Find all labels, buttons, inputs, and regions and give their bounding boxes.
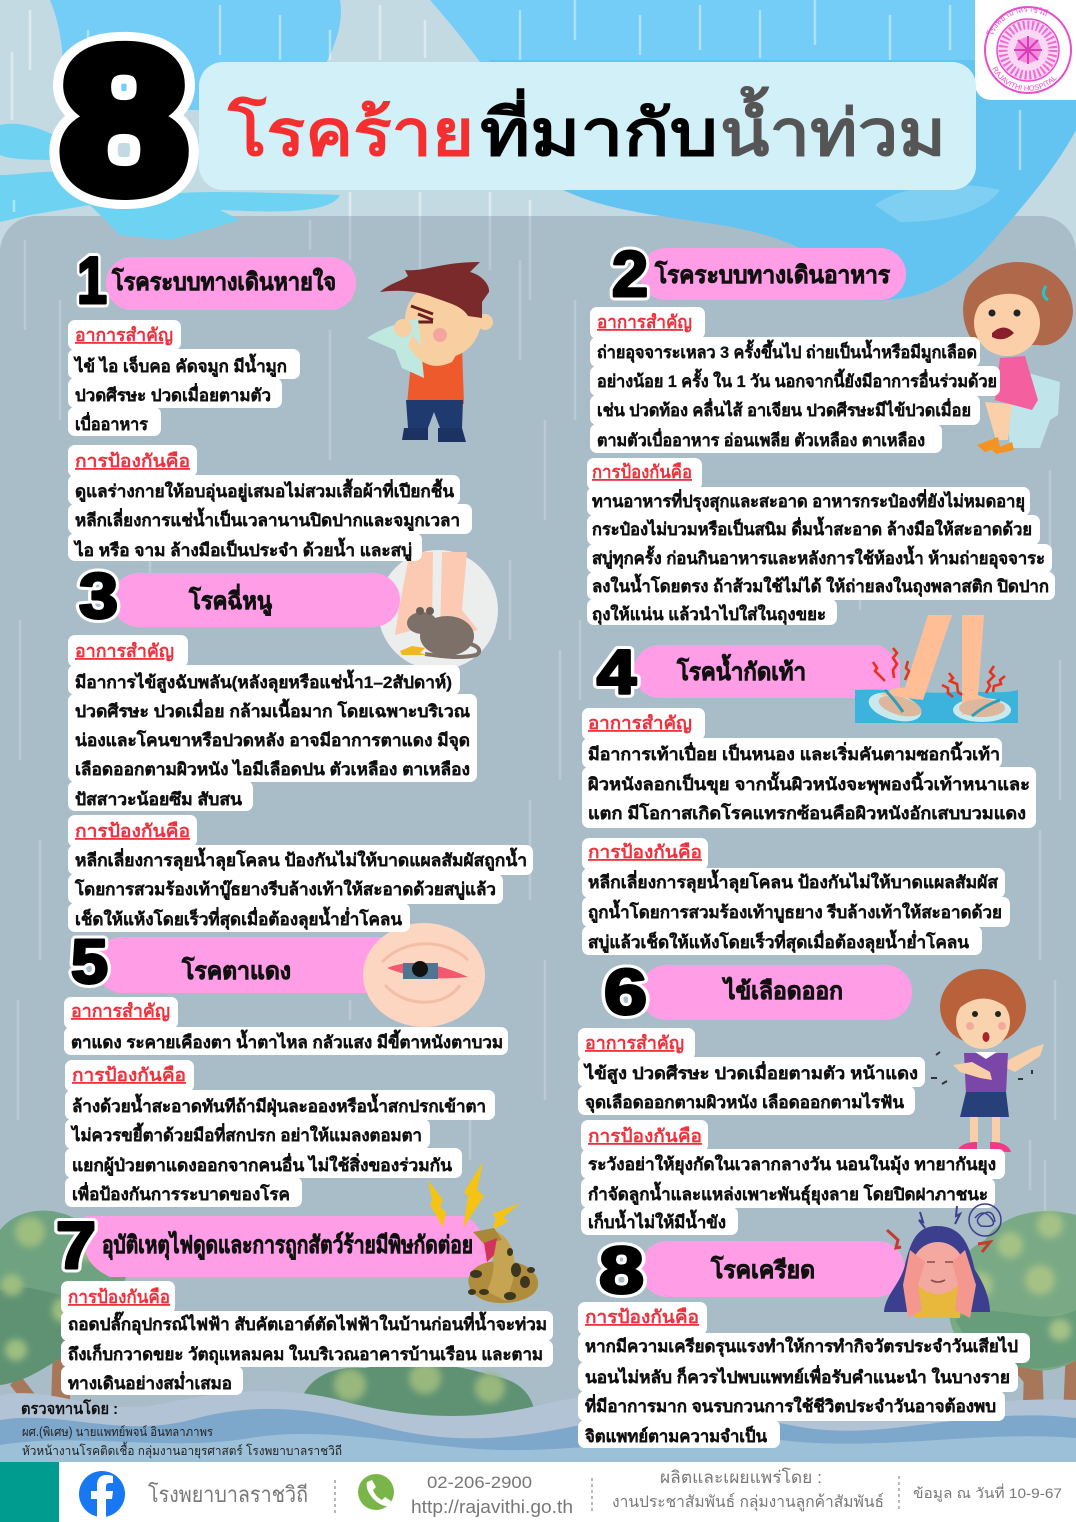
prevention block 5: เพื่อป้องกันการระบาดของโรค — [72, 1182, 290, 1204]
prevention block 7: ทางเดินอย่างสม่ำเสมอ — [68, 1371, 232, 1393]
prevention block 7: ถอดปลั๊กอุปกรณ์ไฟฟ้า สับคัตเอาต์ตัดไฟฟ้าในบ้านก่อนที่น้ำจะท่วม — [68, 1311, 547, 1335]
symptoms block 1 — [68, 320, 300, 436]
prevention block 4: หลีกเลี่ยงการลุยน้ำลุยโคลน ป้องกันไม่ให้บาดแผลสัมผัส — [588, 869, 999, 893]
symptoms block 3: ปัสสาวะน้อยซึม สับสน — [75, 790, 242, 809]
symptoms block 2: อาการสำคัญ — [597, 312, 692, 333]
prevention block 2: ถุงให้แน่น แล้วนำไปใส่ในถุงขยะ — [592, 604, 826, 625]
title bar — [199, 62, 976, 190]
pill title 3 — [112, 573, 400, 627]
symptoms block 6: อาการสำคัญ — [585, 1033, 684, 1054]
footer bar — [0, 1462, 1076, 1522]
prevention block 3: เช็ดให้แห้งโดยเร็วที่สุดเมื่อต้องลุยน้ำย่ำโคลน — [75, 906, 402, 930]
pill title 1 — [106, 257, 356, 310]
contact — [411, 1473, 573, 1517]
publisher — [612, 1467, 884, 1512]
pill title 5 — [95, 937, 415, 993]
pill title 2 — [640, 248, 906, 300]
illustration: sneezing boy — [367, 262, 493, 442]
symptoms block 2: เช่น ปวดท้อง คลื่นไส้ อาเจียน ปวดศีรษะมีไข้ปวดเมื่อย — [597, 398, 971, 420]
illustration: rat and feet — [378, 550, 498, 670]
contact: http://rajavithi.go.th — [411, 1497, 573, 1517]
number 5: 5 — [71, 928, 108, 997]
pill title 6 — [640, 965, 912, 1020]
symptoms block 5: อาการสำคัญ — [71, 1001, 170, 1022]
prevention block 6 — [581, 1120, 1005, 1235]
number 2: 2 — [612, 238, 648, 310]
facebook page name: โรงพยาบาลราชวิถี — [148, 1482, 308, 1507]
symptoms block 3 — [68, 635, 477, 811]
symptoms block 3: มีอาการไข้สูงฉับพลัน(หลังลุยหรือแช่น้ำ1–2สัปดาห์) — [75, 669, 452, 694]
prevention block 3: หลีกเลี่ยงการลุยน้ำลุยโคลน ป้องกันไม่ให้บาดแผลสัมผัสถูกน้ำ — [75, 847, 527, 872]
prevention block 8: นอนไม่หลับ ก็ควรไปพบแพทย์เพื่อรับคำแนะนำ ในบางราย — [585, 1365, 1010, 1387]
prevention block 3 — [68, 815, 533, 932]
pill title 8: โรคเครียด — [710, 1255, 815, 1284]
reviewer credit: หัวหน้างานโรคติดเชื้อ กลุ่มงานอายุรศาสตร์ โรงพยาบาลราชวิถี — [22, 1441, 342, 1459]
prevention block 8: จิตแพทย์ตามความจำเป็น — [585, 1424, 767, 1446]
number 8: 8 — [599, 1233, 644, 1307]
pill title 2: โรคระบบทางเดินอาหาร — [654, 260, 890, 289]
symptoms block 4: แตก มีโอกาสเกิดโรคแทรกซ้อนคือผิวหนังอักเสบบวมแดง — [588, 803, 1026, 823]
number 5: 5 — [71, 928, 108, 997]
title bar: โรคร้าย — [227, 95, 474, 169]
panel: disease 7 accidents — [56, 1162, 553, 1395]
big number 8: 8 — [60, 6, 188, 235]
pill title 5: โรคตาแดง — [181, 956, 291, 985]
pill title 7: อุบัติเหตุไฟดูดและการถูกสัตว์ร้ายมีพิษกัดต่อย — [102, 1230, 473, 1261]
prevention block 2: กระป๋องไม่บวมหรือเป็นสนิม ดื่มน้ำสะอาด ล้างมือให้สะอาดด้วย — [592, 516, 1032, 539]
symptoms block 6: ไข้สูง ปวดศีรษะ ปวดเมื่อยตามตัว หน้าแดง — [583, 1061, 918, 1085]
illustration: girl on toilet — [963, 262, 1073, 454]
number 3: 3 — [79, 560, 118, 632]
logo: hospital seal: โรงพยาบาลราชวิถี — [986, 7, 1048, 34]
prevention block 1: ไอ หรือ จาม ล้างมือเป็นประจำ ด้วยน้ำ และสบู่ — [73, 537, 412, 562]
number 8: 8 — [599, 1233, 644, 1307]
icon: lightning bolts — [428, 1162, 520, 1230]
illustration: stressed woman — [884, 1204, 1001, 1318]
publisher: ผลิตและเผยแพร่โดย : — [660, 1467, 822, 1487]
illustration: snake — [468, 1228, 538, 1303]
prevention block 5: แยกผู้ป่วยตาแดงออกจากคนอื่น ไม่ใช้สิ่งของร่วมกัน — [72, 1153, 452, 1177]
prevention block 8 — [578, 1302, 1030, 1448]
panel: disease 4 athlete's foot — [582, 615, 1036, 955]
panel: disease 5 conjunctivitis — [64, 923, 508, 1207]
symptoms block 1: ไข้ ไอ เจ็บคอ คัดจมูก มีน้ำมูก — [73, 353, 287, 378]
symptoms block 3: น่องและโคนขาหรือปวดหลัง อาจมีอาการตาแดง มีจุด — [75, 730, 470, 751]
number 6: 6 — [604, 956, 647, 1028]
prevention block 7 — [61, 1281, 553, 1395]
pill title 8 — [640, 1241, 905, 1297]
symptoms block 3: ปวดศีรษะ ปวดเมื่อย กล้ามเนื้อมาก โดยเฉพาะบริเวณ — [75, 698, 470, 721]
number 2: 2 — [612, 238, 648, 310]
logo: hospital seal: RAJAVITHI HOSPITAL — [992, 66, 1057, 91]
prevention block 8: ที่มีอาการมาก จนรบกวนการใช้ชีวิตประจำวันอาจต้องพบ — [585, 1394, 996, 1416]
pill title 4: โรคน้ำกัดเท้า — [676, 653, 806, 686]
trees: centre — [300, 1362, 535, 1420]
prevention block 2: สบู่ทุกครั้ง ก่อนกินอาหารและหลังการใช้ห้องน้ำ ห้ามถ่ายอุจจาระ — [592, 545, 1045, 570]
symptoms block 3: เลือดออกตามผิวหนัง ไอมีเลือดปน ตัวเหลือง ตาเหลือง — [75, 759, 470, 779]
symptoms block 6 — [578, 1028, 925, 1115]
number 6: 6 — [604, 956, 647, 1028]
pill title 1: โรคระบบทางเดินหายใจ — [111, 267, 336, 296]
number 1: 1 — [77, 243, 107, 317]
symptoms block 4: มีอาการเท้าเปื่อย เป็นหนอง และเริ่มคันตามซอกนิ้วเท้า — [588, 741, 1000, 764]
prevention block 5: ไม่ควรขยี้ตาด้วยมือที่สกปรก อย่าให้แมลงตอมตา — [70, 1122, 422, 1145]
symptoms block 4: อาการสำคัญ — [588, 713, 692, 734]
logo: hospital seal — [975, 0, 1076, 100]
number 4: 4 — [597, 638, 637, 707]
illustration: girl with mosquitoes — [931, 969, 1044, 1152]
symptoms block 2: ถ่ายอุจจาระเหลว 3 ครั้งขึ้นไป ถ่ายเป็นน้ำหรือมีมูกเลือด — [597, 339, 977, 364]
prevention block 3: โดยการสวมร้องเท้าบู๊ธยางรีบล้างเท้าให้สะอาดด้วยสบู่แล้ว — [74, 879, 496, 901]
number 1: 1 — [77, 243, 107, 317]
symptoms block 1: อาการสำคัญ — [75, 325, 173, 346]
number 3: 3 — [79, 560, 118, 632]
prevention block 8: หากมีความเครียดรุนแรงทำให้การทำกิจวัตรประจำวันเสียไป — [585, 1336, 1018, 1357]
icon: facebook — [79, 1471, 125, 1517]
prevention block 6: กำจัดลูกน้ำและแหล่งเพาะพันธุ์ยุงลาย โดยปิดฝาภาชนะ — [588, 1181, 988, 1206]
title bar: น้ำท่วม — [720, 86, 946, 169]
illustration: red eye — [363, 923, 485, 1027]
pill title 3: โรคฉี่หนู — [188, 583, 273, 616]
publisher: งานประชาสัมพันธ์ กลุ่มงานลูกค้าสัมพันธ์ — [612, 1492, 884, 1512]
symptoms block 6: จุดเลือดออกตามผิวหนัง เลือดออกตามไรฟัน — [585, 1092, 904, 1113]
number 7: 7 — [56, 1208, 96, 1282]
trees: right — [947, 1211, 1076, 1440]
prevention block 2: การป้องกันคือ — [592, 462, 692, 482]
symptoms block 2: อย่างน้อย 1 ครั้ง ใน 1 วัน นอกจากนี้ยังมีอาการอื่นร่วมด้วย — [597, 368, 997, 391]
prevention block 8: การป้องกันคือ — [585, 1307, 699, 1327]
symptoms block 3: อาการสำคัญ — [75, 641, 174, 662]
prevention block 7: ถึงเก็บกวาดขยะ วัตถุแหลมคม ในบริเวณอาคารบ้านเรือน และตาม — [68, 1342, 543, 1365]
reviewer credit: ผศ.(พิเศษ) นายแพทย์พจน์ อินทลาภาพร — [22, 1425, 213, 1439]
big number 8: 8 — [60, 6, 188, 235]
prevention block 1: หลีกเลี่ยงการแช่น้ำเป็นเวลานานปิดปากและจมูกเวลา — [75, 507, 460, 532]
number 7: 7 — [56, 1208, 96, 1282]
title bar: ที่มากับ — [480, 88, 718, 169]
symptoms block 4: ผิวหนังลอกเป็นขุย จากนั้นผิวหนังจะพุพองนิ้วเท้าหนาและ — [588, 771, 1030, 795]
date: ข้อมูล ณ วันที่ 10-9-67 — [913, 1484, 1062, 1502]
symptoms block 1: เบื่ออาหาร — [75, 412, 149, 434]
prevention block 2: ทานอาหารที่ปรุงสุกและสะอาด อาหารกระป๋องที่ยังไม่หมดอายุ — [592, 489, 1025, 512]
panel: disease 6 dengue — [578, 956, 1044, 1235]
icon: phone — [358, 1474, 394, 1510]
prevention block 5: การป้องกันคือ — [72, 1065, 186, 1085]
reviewer credit: ตรวจทานโดย : — [21, 1398, 118, 1418]
prevention block 5: ล้างด้วยน้ำสะอาดทันทีถ้ามีฝุ่นละอองหรือน้ำสกปรกเข้าตา — [72, 1093, 486, 1117]
symptoms block 1: ปวดศีรษะ ปวดเมื่อยตามตัว — [75, 383, 271, 405]
prevention block 6: ระวังอย่าให้ยุงกัดในเวลากลางวัน นอนในมุ้ง ทายากันยุง — [588, 1154, 996, 1175]
pill title 7 — [85, 1216, 492, 1277]
contact: 02-206-2900 — [427, 1473, 532, 1492]
water waves — [0, 1391, 1076, 1462]
prevention block 4: สบู่แล้วเช็ดให้แห้งโดยเร็วที่สุดเมื่อต้องลุยน้ำย่ำโคลน — [588, 929, 969, 954]
pill title 6: ไข้เลือดออก — [721, 976, 843, 1005]
prevention block 5 — [65, 1060, 495, 1207]
illustration: feet in water — [855, 615, 1018, 727]
prevention block 1: การป้องกันคือ — [75, 451, 190, 471]
symptoms block 5: ตาแดง ระคายเคืองตา น้ำตาไหล กลัวแสง มีขี้ตาหนังตาบวม — [71, 1029, 503, 1052]
number 4: 4 — [597, 638, 637, 707]
prevention block 4 — [582, 838, 1010, 955]
panel: disease 8 stress — [578, 1204, 1030, 1448]
panel: disease 2 digestive — [587, 238, 1073, 625]
prevention block 2: ลงในน้ำโดยตรง ถ้าส้วมใช้ไม่ได้ ให้ถ่ายลงในถุงพลาสติก ปิดปาก — [592, 573, 1049, 597]
symptoms block 2: ตามตัวเบื่ออาหาร อ่อนเพลีย ตัวเหลือง ตาเหลือง — [597, 428, 925, 450]
prevention block 7: การป้องกันคือ — [68, 1287, 170, 1307]
prevention block 3: การป้องกันคือ — [75, 821, 190, 841]
prevention block 1 — [68, 445, 472, 562]
symptoms block 5 — [64, 997, 508, 1055]
trees: left — [0, 1211, 128, 1440]
panel: disease 3 leptospirosis — [68, 550, 533, 932]
reviewer credit — [21, 1398, 342, 1459]
prevention block 6: เก็บน้ำไม่ให้มีน้ำขัง — [588, 1209, 726, 1232]
panel: disease 1 respiratory — [68, 243, 493, 562]
prevention block 2 — [587, 458, 1055, 625]
prevention block 4: ถูกน้ำโดยการสวมร้องเท้าบูธยาง รีบล้างเท้าให้สะอาดด้วย — [588, 899, 1002, 924]
symptoms block 4 — [582, 708, 1036, 828]
prevention block 1: ดูแลร่างกายให้อบอุ่นอยู่เสมอไม่สวมเสื้อผ้าที่เปียกชื้น — [75, 478, 454, 503]
pill title 4 — [634, 645, 900, 698]
symptoms block 2 — [590, 307, 1000, 453]
prevention block 6: การป้องกันคือ — [588, 1126, 702, 1146]
prevention block 4: การป้องกันคือ — [588, 842, 702, 862]
